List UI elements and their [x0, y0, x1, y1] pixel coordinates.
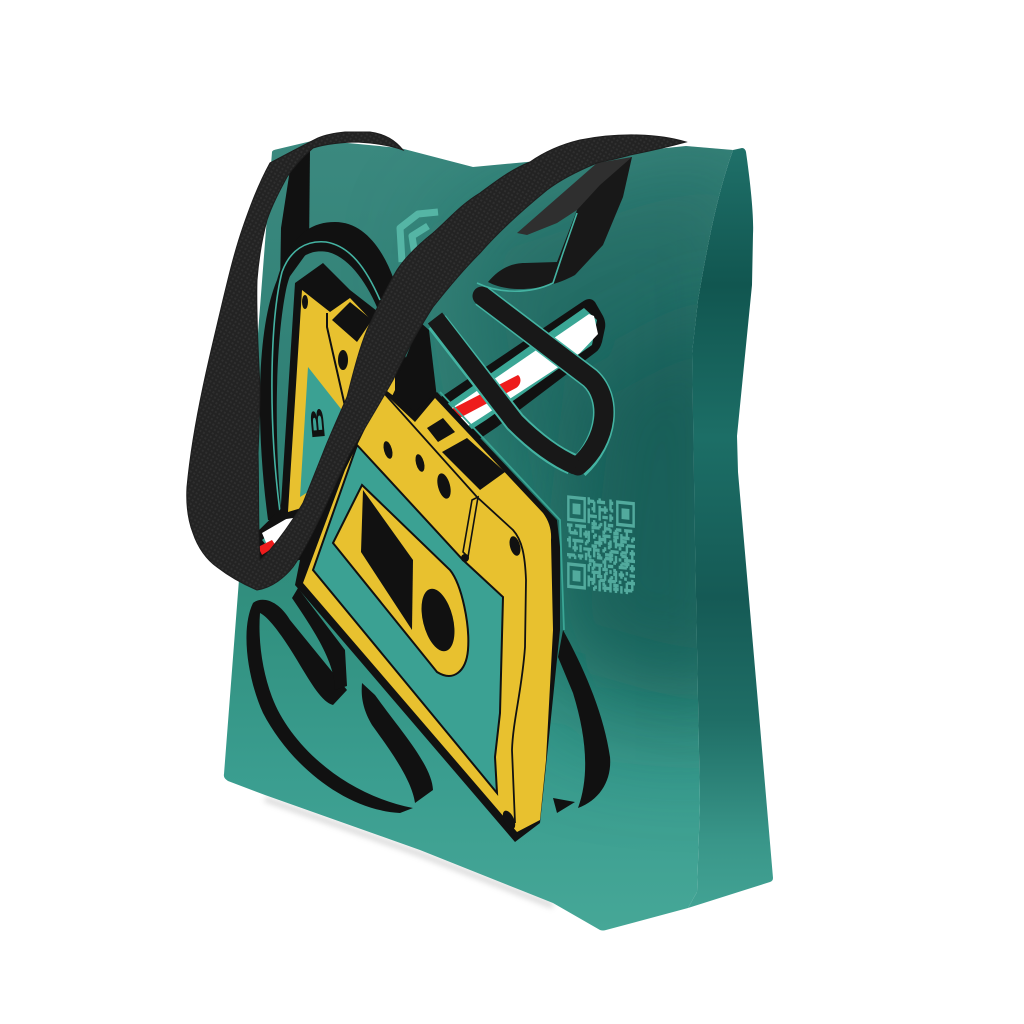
strap gap sliver: [632, 142, 668, 156]
cassette: hinge: [463, 497, 478, 557]
tape ribbons behind cassette: [246, 150, 610, 813]
ribbon: vertical strand: [280, 150, 310, 290]
ribbon: upper arc: [260, 222, 402, 520]
ribbon: lower right arc: [558, 630, 610, 808]
side gusset: [688, 148, 773, 908]
back cassette: outline: [280, 263, 420, 520]
back cassette: teal label: [300, 367, 345, 497]
front panel: [224, 140, 733, 930]
QR finder patterns: [568, 497, 634, 593]
cassette: yellow shell: [303, 392, 553, 832]
stick: white bar: [262, 314, 598, 552]
strap back tab: [517, 157, 632, 235]
ribbon: lower left strand: [292, 588, 347, 690]
main cassette: [295, 382, 564, 842]
QR code: [567, 495, 635, 595]
back cassette: yellow shell: [288, 290, 395, 512]
faint logo icon: [400, 212, 438, 262]
loop: upper teal edge: [477, 213, 577, 291]
bag ground shadow: [265, 799, 553, 906]
ribbon: lower right tip: [553, 798, 575, 813]
cassette: small black square: [427, 418, 455, 442]
loop: teal outline: [437, 296, 604, 468]
pulled tape stick: [254, 299, 605, 566]
back cassette: screw 2: [338, 350, 348, 370]
stick: teal edge: [262, 308, 597, 556]
bag body: [224, 130, 773, 930]
cassette: spool hole: [416, 585, 460, 655]
tote bag product illustration: [186, 132, 773, 930]
QR data modules crossing: [570, 495, 632, 595]
cassette: large black square: [442, 438, 505, 490]
cassette: screw base: [461, 554, 469, 562]
right tape loop: [435, 157, 632, 468]
cassette: top holes: [382, 440, 522, 831]
strands beside strap: [395, 322, 437, 418]
cassette: teal label: [313, 445, 503, 793]
loop: band two: [435, 318, 576, 466]
black shoulder strap: [187, 132, 686, 590]
QR data modules: [567, 499, 635, 591]
ribbon: teal inner highlight: [272, 242, 380, 512]
back cassette: screw: [302, 295, 308, 309]
stick: red stripe lower: [258, 540, 276, 555]
cassette: teal outer glow: [440, 392, 564, 630]
ribbon: lower middle strand: [362, 683, 433, 803]
ribbon: lower left long curl: [246, 600, 413, 813]
cassette: panel line: [383, 392, 526, 823]
stick: black outline: [254, 299, 605, 566]
back cassette: edge line: [327, 313, 347, 415]
cassette: yellow window plate: [333, 485, 468, 676]
loop: band one: [482, 296, 604, 466]
stick: red stripe: [448, 375, 520, 422]
loop: upper band: [488, 157, 632, 289]
cassette: black outline: [295, 382, 560, 842]
back cassette: side letter: B: [306, 406, 329, 440]
back cassette: black window: [332, 302, 372, 342]
front panel shading: [450, 130, 760, 740]
cassette: black window: [361, 490, 413, 630]
back cassette: [280, 263, 420, 520]
